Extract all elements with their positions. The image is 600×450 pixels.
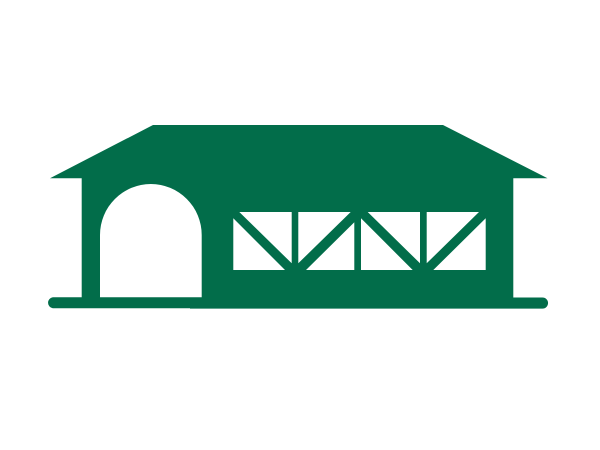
- icon: green covered bridge: [48, 125, 548, 309]
- pane 1: [233, 212, 292, 270]
- pane 2: [298, 212, 354, 270]
- roof and walls: [48, 125, 548, 309]
- pane 4: [427, 212, 486, 270]
- pane 3: [361, 212, 420, 270]
- window panes with truss diagonals: [233, 212, 486, 270]
